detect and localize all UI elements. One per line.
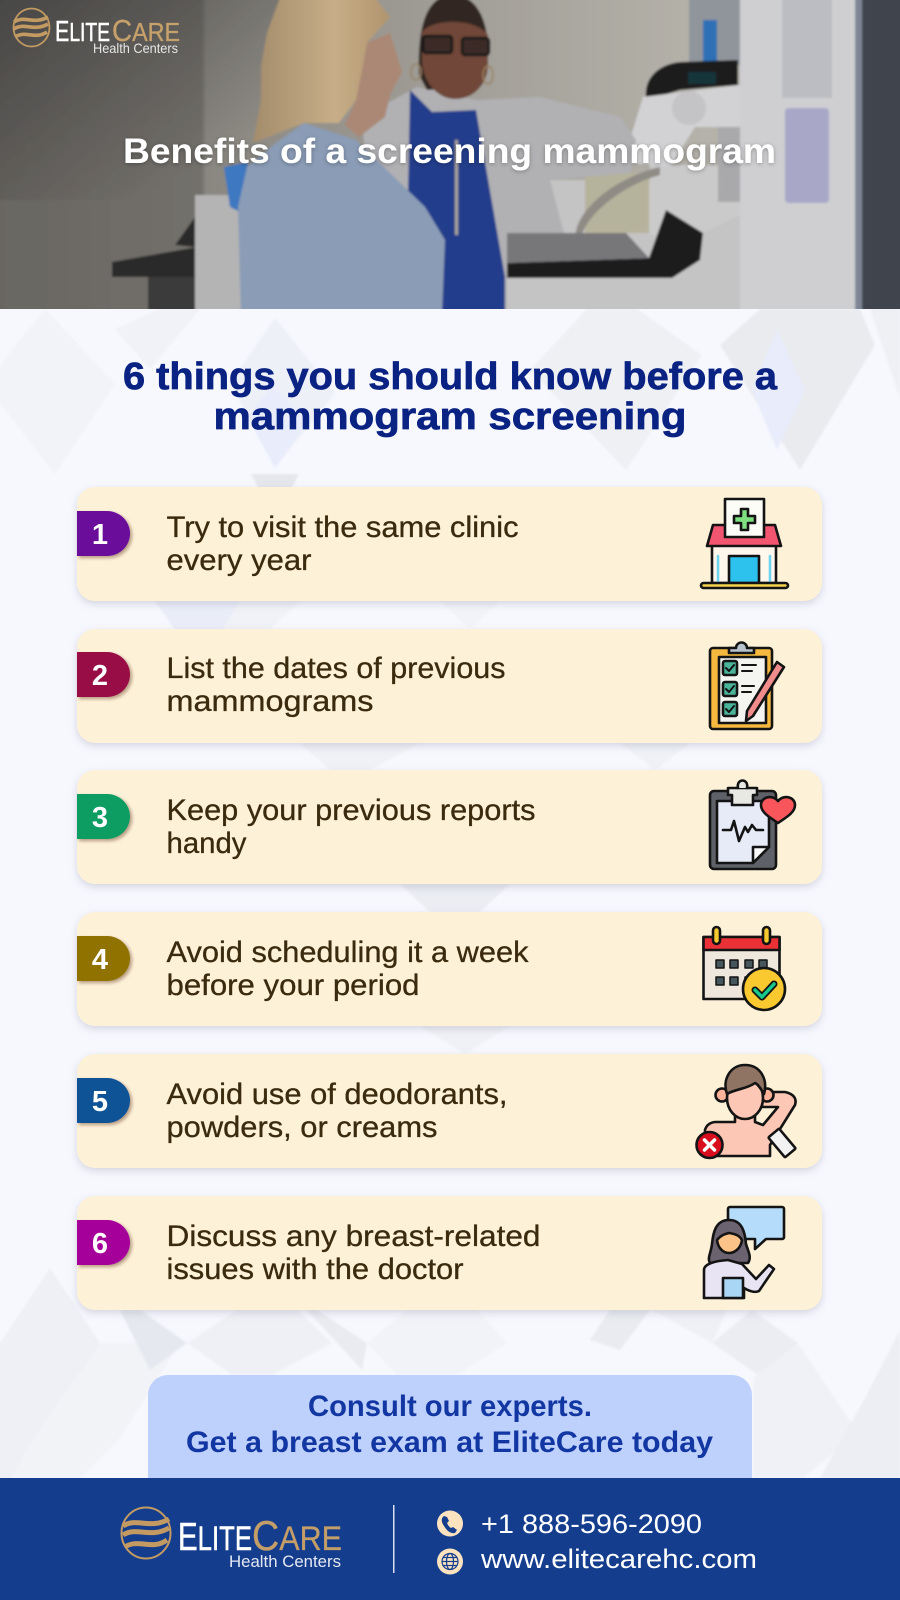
number badge 6: 6	[92, 1228, 108, 1260]
doctor coat	[362, 87, 636, 313]
text: step 5: Avoid use of deodorants,	[166, 1078, 508, 1111]
number badge 4: 4	[92, 944, 108, 976]
text: step 3: Keep your previous reports	[166, 794, 536, 827]
text: step 4: before your period	[166, 969, 420, 1002]
number badge 2	[77, 652, 130, 697]
panel: step 3	[77, 770, 822, 884]
panel: step 5	[77, 1054, 822, 1168]
header logo: ELITE	[55, 16, 110, 48]
text: step 2	[166, 652, 506, 718]
panel: step 2	[77, 629, 822, 743]
header logo: CARE	[112, 13, 180, 48]
number badge 1	[77, 511, 130, 556]
page background with diamond pattern	[0, 309, 900, 1498]
number badge 6	[77, 1220, 130, 1265]
icon: globe	[437, 1548, 463, 1574]
icon: doctor speech	[704, 1207, 784, 1298]
call to action box	[148, 1375, 752, 1478]
patient	[224, 162, 248, 212]
text: step 2: mammograms	[166, 685, 374, 718]
call to action box: Consult our experts.	[308, 1390, 592, 1423]
text: step 1: Try to visit the same clinic	[166, 511, 518, 544]
hero photo	[0, 0, 900, 325]
icon: medical report	[710, 780, 795, 869]
footer logo: CARE	[252, 1512, 342, 1559]
text: step 6	[166, 1220, 540, 1286]
panel: step 6	[77, 1196, 822, 1310]
left table	[112, 247, 197, 277]
icon: phone	[437, 1510, 463, 1536]
icon: clinic	[701, 499, 788, 588]
text: step 4	[166, 936, 529, 1002]
text: step 3	[166, 794, 536, 860]
icon: underarm no deodorant	[696, 1065, 796, 1158]
number badge 3: 3	[92, 802, 108, 834]
text: step 6: Discuss any breast-related	[166, 1220, 540, 1253]
number badge 1: 1	[92, 519, 108, 551]
text: step 1	[166, 511, 518, 577]
number badge 5: 5	[92, 1086, 108, 1118]
header logo	[14, 8, 180, 56]
number badge 2: 2	[92, 660, 108, 692]
heading	[123, 356, 778, 438]
call to action box: Get a breast exam at EliteCare today	[186, 1426, 714, 1459]
logo emblem	[14, 8, 50, 46]
icon: calendar	[704, 927, 785, 1010]
text: phone: +1 888-596-2090	[481, 1509, 702, 1539]
text: website: www.elitecarehc.com	[480, 1544, 757, 1574]
footer logo	[122, 1508, 342, 1571]
text: step 5	[166, 1078, 508, 1144]
text: step 2: List the dates of previous	[166, 652, 506, 685]
text: step 5: powders, or creams	[166, 1111, 438, 1144]
panel: step 1	[77, 487, 822, 601]
number badge 5	[77, 1078, 130, 1123]
footer bar	[0, 1478, 900, 1600]
title: Benefits of a screening mammogram	[123, 132, 776, 171]
panel: step 4	[77, 912, 822, 1026]
text: step 4: Avoid scheduling it a week	[166, 936, 529, 969]
heading: 6 things you should know before a	[123, 356, 778, 398]
number badge 3	[77, 794, 130, 839]
text: step 3: handy	[166, 827, 247, 860]
heading: mammogram screening	[214, 396, 686, 438]
machine	[689, 0, 744, 65]
doctor head	[419, 0, 488, 90]
text: step 6: issues with the doctor	[166, 1253, 464, 1286]
number badge 4	[77, 936, 130, 981]
icon: checklist	[710, 642, 784, 729]
footer logo: ELITE	[178, 1516, 252, 1559]
text: step 1: every year	[166, 544, 312, 577]
header logo: Health Centers	[93, 40, 178, 56]
footer logo: Health Centers	[229, 1553, 341, 1571]
